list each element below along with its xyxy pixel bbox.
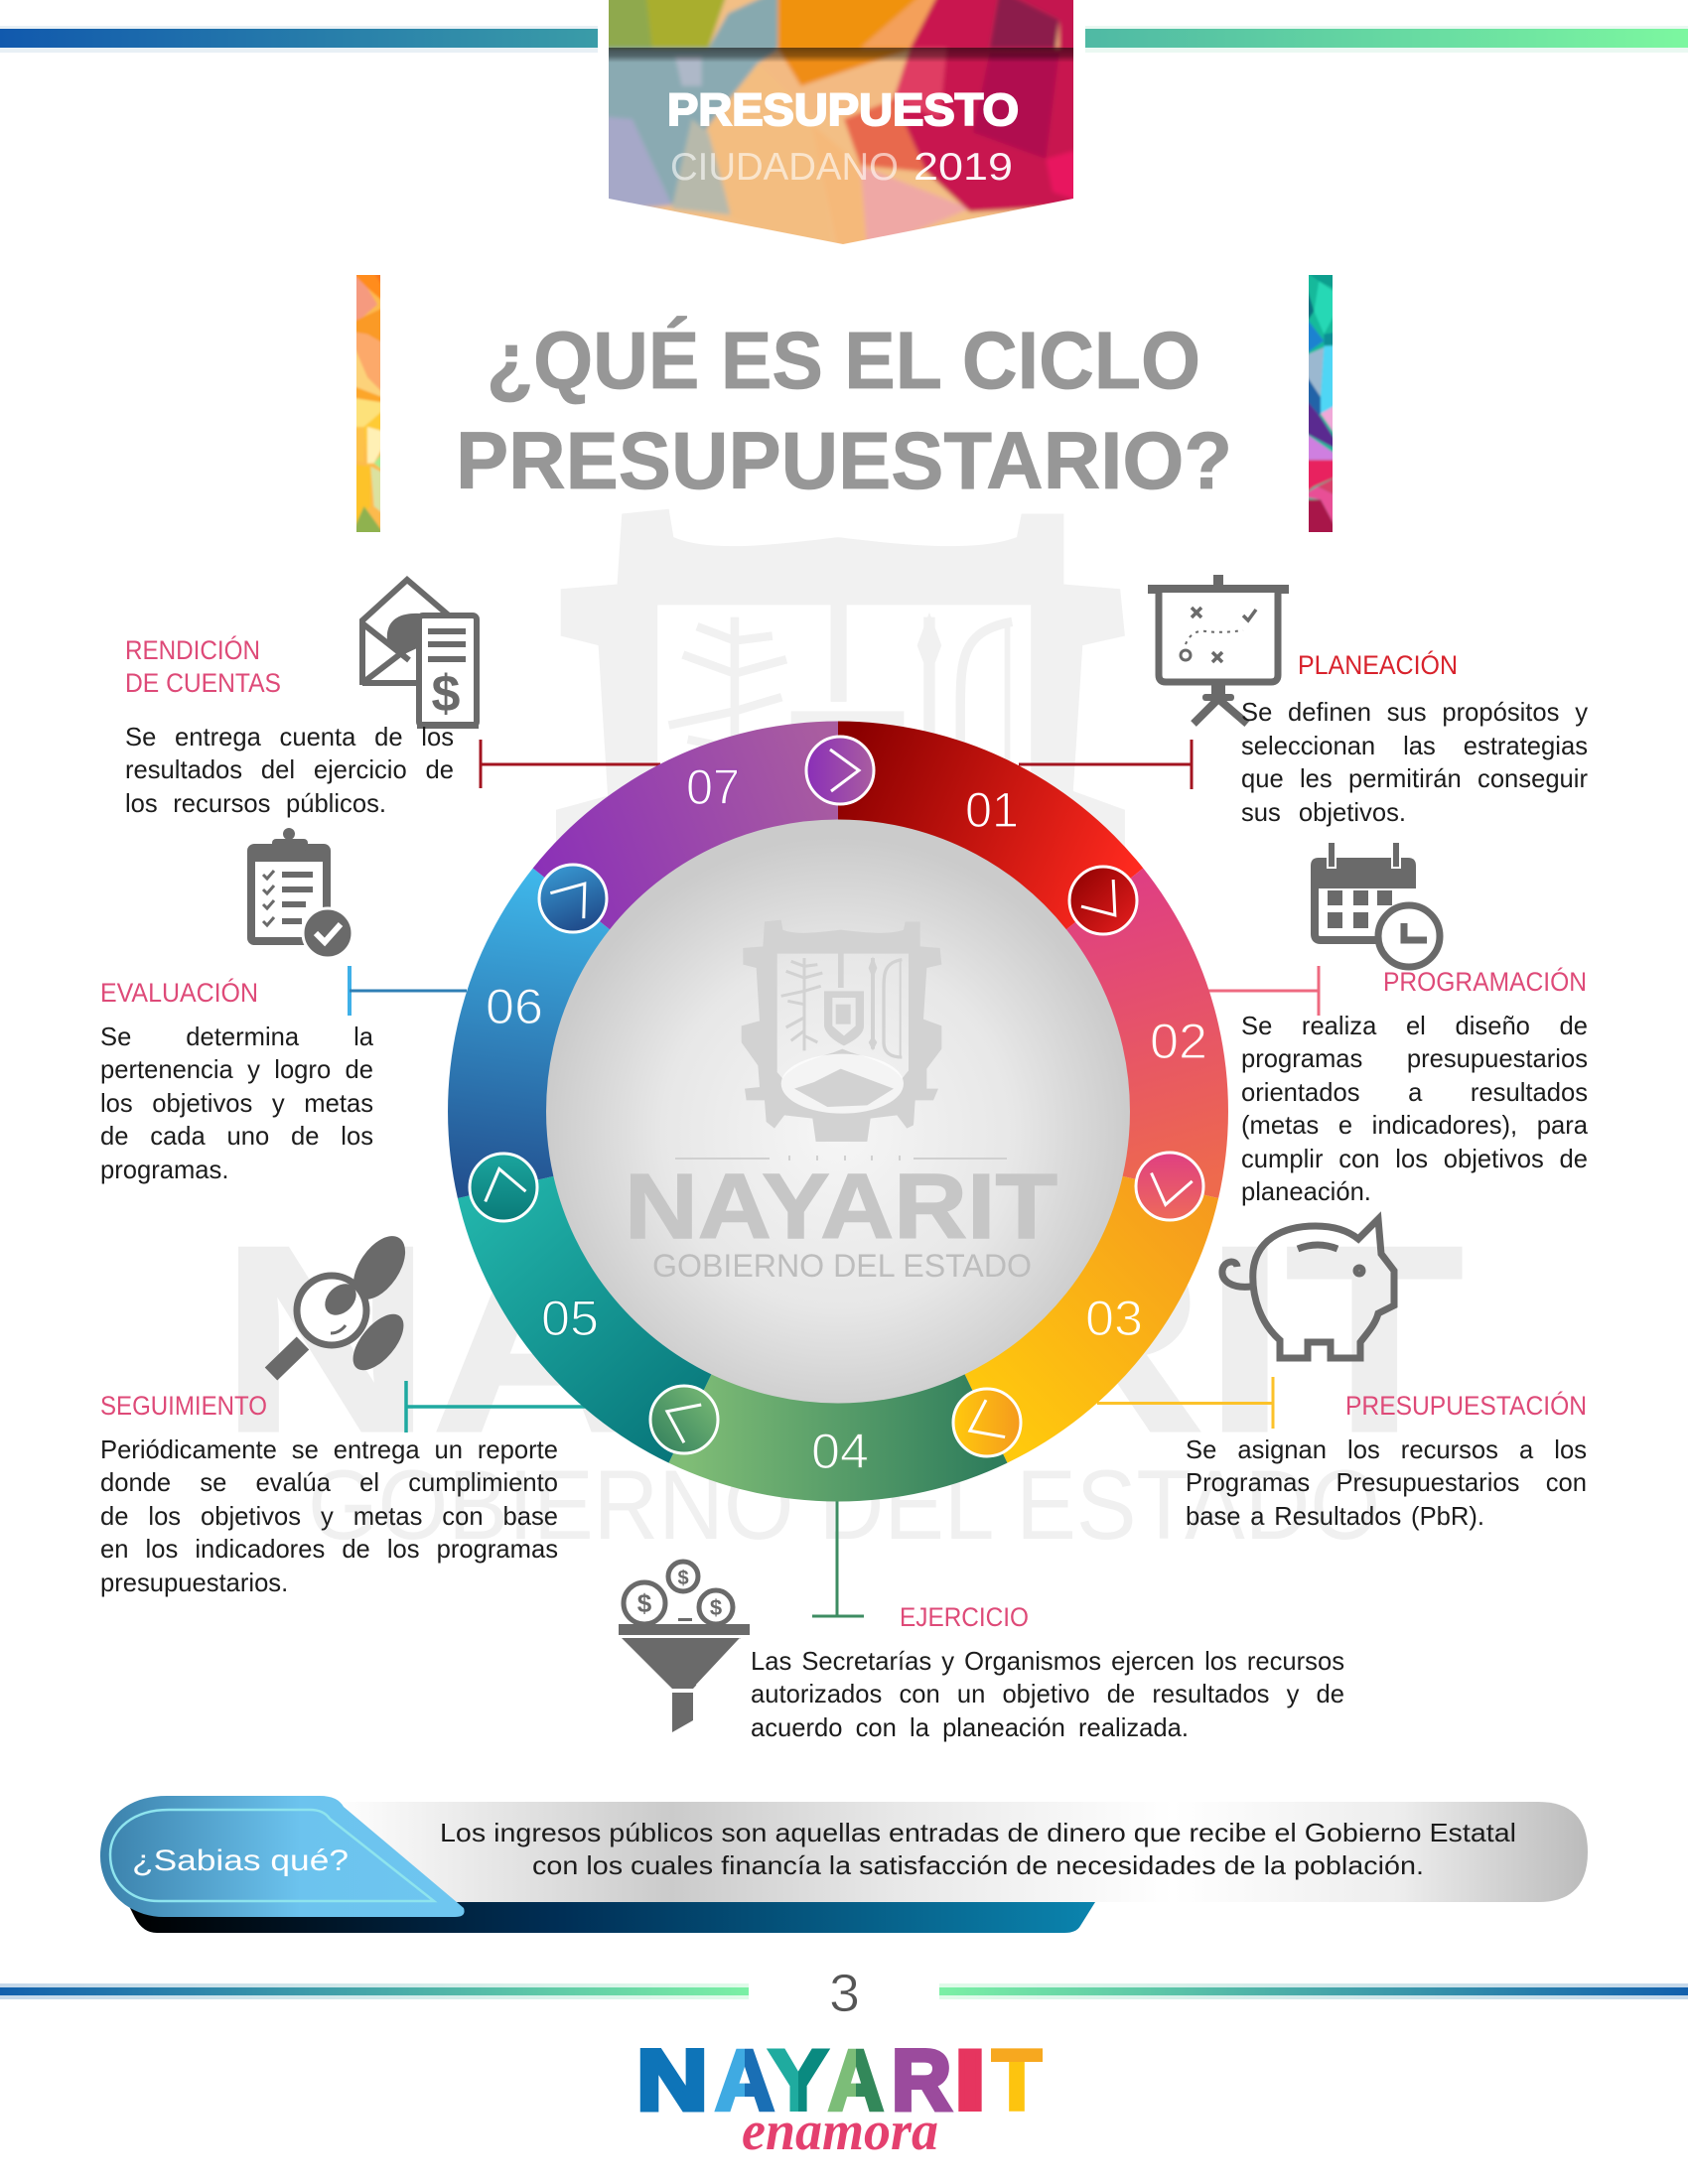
text: programacion: Se realiza el diseño de xyxy=(1241,1013,1588,1040)
text: seguimiento xyxy=(100,1435,558,1596)
text: presupuestacion: Se asignan los recursos a los xyxy=(1186,1435,1587,1463)
text: ejercicio: acuerdo con la planeación realizada. xyxy=(751,1713,1189,1741)
logo: Nayarit enamora: I xyxy=(953,2033,987,2128)
logo: Nayarit enamora: A xyxy=(715,2033,774,2128)
text: programacion: programas presupuestarios xyxy=(1241,1045,1588,1073)
icon: clipboard checklist xyxy=(247,828,352,958)
text: planeacion: Se definen sus propósitos y xyxy=(1241,699,1588,727)
text: rendicion de cuentas: Se entrega cuenta de los xyxy=(125,723,454,751)
callout tab inner line xyxy=(110,1810,434,1901)
text: evaluacion: programas. xyxy=(100,1156,228,1183)
text: seguimiento: donde se evalúa el cumplimiento xyxy=(100,1469,558,1497)
heading: planeacion: PLANEACIÓN xyxy=(1298,650,1458,680)
heading: seguimiento: SEGUIMIENTO xyxy=(100,1391,267,1421)
segment numbers: 05 xyxy=(541,1291,599,1346)
segment 02 xyxy=(1066,868,1228,1198)
segment 04 xyxy=(669,1374,1007,1502)
logo: Nayarit enamora: T xyxy=(992,2033,1042,2128)
segment 01 xyxy=(838,721,1143,929)
segment 07 xyxy=(533,721,838,929)
text: seguimiento: presupuestarios. xyxy=(100,1569,288,1596)
icon: calendar and clock xyxy=(1311,842,1440,967)
center logo: GOBIERNO DEL ESTADO: GOBIERNO DEL ESTADO xyxy=(652,1248,1032,1284)
logo: Nayarit enamora: enamora xyxy=(742,2101,938,2162)
segment numbers: 01 xyxy=(965,782,1019,838)
callout dark underbar xyxy=(127,1902,1095,1933)
title: PRESUPUESTARIO? xyxy=(456,416,1232,506)
text: planeacion xyxy=(1241,699,1588,826)
segment numbers: 02 xyxy=(1150,1014,1207,1069)
budget cycle ring xyxy=(448,721,1228,1502)
segment numbers: 07 xyxy=(686,759,740,815)
icon: funnel with coins xyxy=(619,1562,750,1732)
heading: ejercicio: EJERCICIO xyxy=(900,1602,1029,1632)
heading: evaluacion: EVALUACIÓN xyxy=(100,978,258,1008)
callout silver bar xyxy=(333,1802,1588,1902)
segment 06 xyxy=(448,868,610,1198)
text: programacion: (metas e indicadores), para xyxy=(1241,1112,1588,1140)
text: evaluacion: pertenencia y logro de xyxy=(100,1056,373,1084)
text: planeacion: seleccionan las estrategias xyxy=(1241,733,1588,760)
segment 05 xyxy=(458,1176,711,1463)
text: rendicion de cuentas: resultados del ejercicio de xyxy=(125,756,454,784)
watermark: large coat of arms xyxy=(556,509,1125,1139)
text: rendicion de cuentas: los recursos públicos. xyxy=(125,790,386,818)
watermark: GOBIERNO DEL ESTADO: GOBIERNO DEL ESTADO xyxy=(308,1449,1380,1560)
footer bar left xyxy=(0,1983,749,1999)
page number: 3 xyxy=(829,1964,860,2023)
text: evaluacion: de cada uno de los xyxy=(100,1123,373,1151)
heading: rendicion de cuentas: RENDICIÓN xyxy=(125,635,260,665)
arrow node 2 xyxy=(1069,867,1137,934)
icon: piggy bank xyxy=(1222,1219,1394,1358)
connector 02 xyxy=(1206,966,1319,1016)
text: presupuestacion xyxy=(1186,1435,1587,1531)
banner title: PRESUPUESTO: PRESUPUESTO xyxy=(667,84,1019,135)
callout text: Los ingresos públicos son aquellas entradas de dinero que recibe el Gobierno Estatal xyxy=(440,1818,1516,1847)
callout: did you know xyxy=(100,1796,1588,1933)
text: evaluacion xyxy=(100,1023,373,1183)
icon: magnifier and footprints xyxy=(271,1227,416,1379)
text: seguimiento: Periódicamente se entrega un reporte xyxy=(100,1435,558,1463)
text: seguimiento: de los objetivos y metas con base xyxy=(100,1503,558,1531)
text: presupuestacion: base a Resultados (PbR). xyxy=(1186,1503,1484,1531)
icon: funnel with coins: $ xyxy=(637,1588,652,1618)
text: ejercicio: Las Secretarías y Organismos ejercen los recursos xyxy=(751,1648,1344,1676)
text: planeacion: sus objetivos. xyxy=(1241,798,1406,826)
icon: presentation board xyxy=(1148,575,1289,724)
center logo: NAYARIT: NAYARIT xyxy=(625,1155,1057,1258)
icon: funnel with coins: $ xyxy=(677,1568,689,1589)
arrow node 5 xyxy=(650,1386,718,1453)
heading: rendicion de cuentas xyxy=(125,635,281,698)
text: rendicion de cuentas xyxy=(125,723,454,818)
connector 05 xyxy=(406,1381,586,1433)
text: presupuestacion: Programas Presupuestarios con xyxy=(1186,1469,1587,1497)
connector 04 xyxy=(812,1494,864,1617)
arrow node 7 xyxy=(539,865,607,932)
text: programacion xyxy=(1241,1013,1588,1206)
arrow node 3 xyxy=(1136,1153,1203,1220)
segment numbers: 04 xyxy=(811,1424,869,1479)
header banner xyxy=(609,0,1073,244)
callout label: ¿Sabias qué? xyxy=(132,1844,349,1877)
text: programacion: orientados a resultados xyxy=(1241,1078,1588,1106)
text: programacion: planeación. xyxy=(1241,1178,1371,1206)
header bar right xyxy=(1085,26,1688,53)
icon: envelope and invoice xyxy=(362,580,479,729)
text: planeacion: que les permitirán conseguir xyxy=(1241,765,1588,793)
logo: Nayarit enamora xyxy=(636,2033,1042,2162)
heading: rendicion de cuentas: DE CUENTAS xyxy=(125,668,281,698)
callout text: con los cuales financía la satisfacción de necesidades de la población. xyxy=(532,1850,1424,1880)
connector 01 xyxy=(1019,740,1192,789)
connector 03 xyxy=(1097,1377,1273,1429)
arrow node 4 xyxy=(953,1389,1021,1456)
banner subtitle: CIUDADANO: CIUDADANO xyxy=(670,146,899,189)
segment 03 xyxy=(965,1176,1218,1463)
text: seguimiento: en los indicadores de los programas xyxy=(100,1536,558,1564)
text: programacion: cumplir con los objetivos de xyxy=(1241,1146,1588,1173)
side decoration right xyxy=(1309,275,1333,532)
text: evaluacion: los objetivos y metas xyxy=(100,1090,373,1118)
center logo: coat of arms xyxy=(742,920,941,1142)
arrow node 6 xyxy=(470,1154,537,1221)
connector 07 xyxy=(481,740,660,788)
logo: Nayarit enamora: R xyxy=(892,2033,951,2128)
side decoration left xyxy=(356,275,380,532)
segment numbers: 03 xyxy=(1085,1291,1143,1346)
heading: presupuestacion: PRESUPUESTACIÓN xyxy=(1345,1391,1587,1421)
logo: Nayarit enamora: Y xyxy=(769,2033,828,2128)
logo: Nayarit enamora: A xyxy=(828,2033,884,2128)
heading: programacion: PROGRAMACIÓN xyxy=(1383,967,1587,997)
footer bar right xyxy=(939,1983,1688,1999)
center logo: divider xyxy=(675,1156,1007,1160)
watermark: NAYARIT: NAYARIT xyxy=(220,1190,1464,1487)
logo: Nayarit enamora: N xyxy=(636,2033,708,2128)
arrow node 1 xyxy=(806,737,874,804)
segment numbers xyxy=(486,759,1207,1479)
header bar left xyxy=(0,26,598,53)
text: ejercicio: autorizados con un objetivo de resultados y de xyxy=(751,1681,1344,1708)
callout blue tab xyxy=(100,1796,465,1917)
icon: funnel with coins: $ xyxy=(710,1595,722,1620)
connector 06 xyxy=(350,966,467,1016)
segment numbers: 06 xyxy=(486,979,543,1034)
text: evaluacion: Se determina la xyxy=(100,1023,373,1050)
callout text xyxy=(440,1818,1516,1880)
text: ejercicio xyxy=(751,1648,1344,1741)
title xyxy=(456,316,1232,506)
title: ¿QUÉ ES EL CICLO xyxy=(487,316,1200,406)
icon: envelope and invoice: $ xyxy=(432,665,461,723)
banner subtitle: 2019: 2019 xyxy=(914,146,1013,189)
center disc xyxy=(544,818,1132,1406)
